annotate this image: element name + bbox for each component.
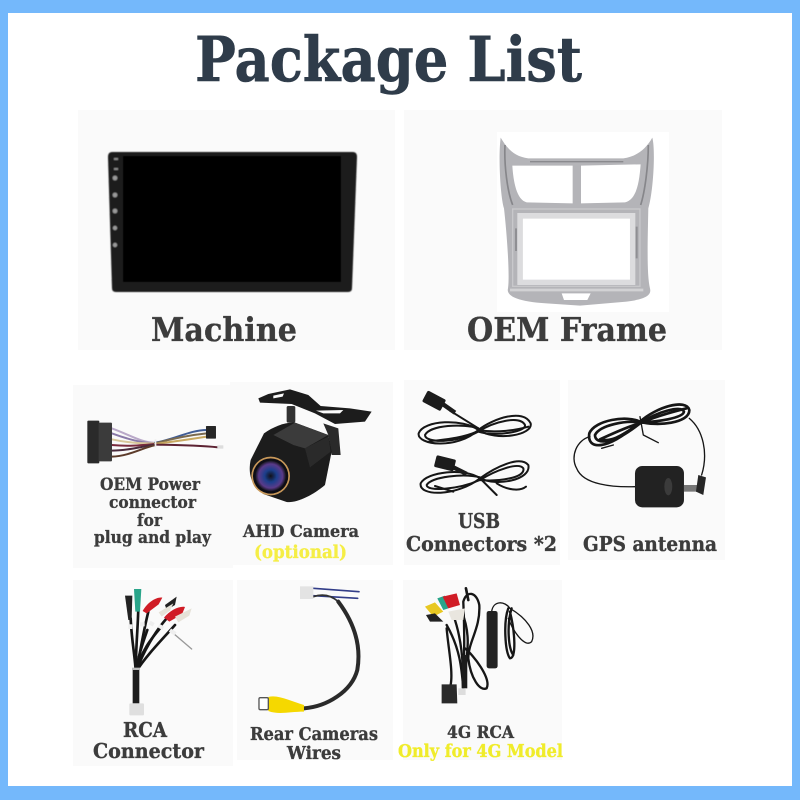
- label: OEM power connector: OEM Power: [100, 475, 200, 494]
- label: OEM frame: OEM Frame: [467, 310, 667, 349]
- icon: 4G harness and antenna: [425, 588, 533, 703]
- label: only for 4G model: Only for 4G Model: [398, 742, 563, 762]
- label: OEM power connector: connector: [109, 493, 196, 512]
- panel: OEM frame: [404, 110, 722, 350]
- label: USB connectors: USB: [458, 509, 500, 533]
- label: GPS antenna: GPS antenna: [583, 532, 717, 556]
- label: AHD camera: AHD Camera: [242, 522, 359, 542]
- icon: RCA video cable: [259, 586, 359, 713]
- panel: GPS antenna: [568, 380, 725, 560]
- label: RCA connector: [93, 718, 205, 763]
- panel: RCA connector: [73, 580, 233, 766]
- panel: USB connectors: [404, 380, 560, 565]
- panel: AHD camera: [230, 382, 393, 565]
- icon: RCA harness: [125, 589, 192, 715]
- icon: wiring harness: [87, 421, 223, 463]
- label: rear camera wires: Wires: [286, 744, 341, 764]
- label: rear camera wires: Rear Cameras: [250, 725, 378, 745]
- label: rear camera wires: [250, 725, 378, 764]
- label: 4G RCA: 4G RCA: [447, 723, 515, 743]
- icon: silver fascia frame: [500, 138, 654, 306]
- label: machine: Machine: [151, 310, 297, 349]
- label: optional: (optional): [254, 543, 347, 563]
- label: RCA connector: RCA: [123, 718, 168, 742]
- title: Package List: [195, 23, 582, 96]
- label: OEM power connector: [94, 475, 211, 547]
- panel: OEM power connector: [73, 385, 233, 568]
- panel: 4G RCA: [398, 580, 563, 762]
- icon: GPS antenna: [574, 405, 706, 507]
- label: OEM power connector: plug and play: [94, 528, 211, 547]
- label: RCA connector: Connector: [93, 739, 205, 763]
- label: OEM power connector: for: [137, 511, 162, 530]
- panel: machine: [78, 110, 395, 350]
- panel: rear camera wires: [237, 580, 393, 764]
- label: USB connectors: [406, 509, 557, 556]
- icon: head unit screen: [108, 152, 357, 292]
- label: USB connectors: Connectors *2: [406, 532, 557, 556]
- icon: USB cables: [419, 390, 531, 495]
- icon: rear camera: [250, 389, 372, 502]
